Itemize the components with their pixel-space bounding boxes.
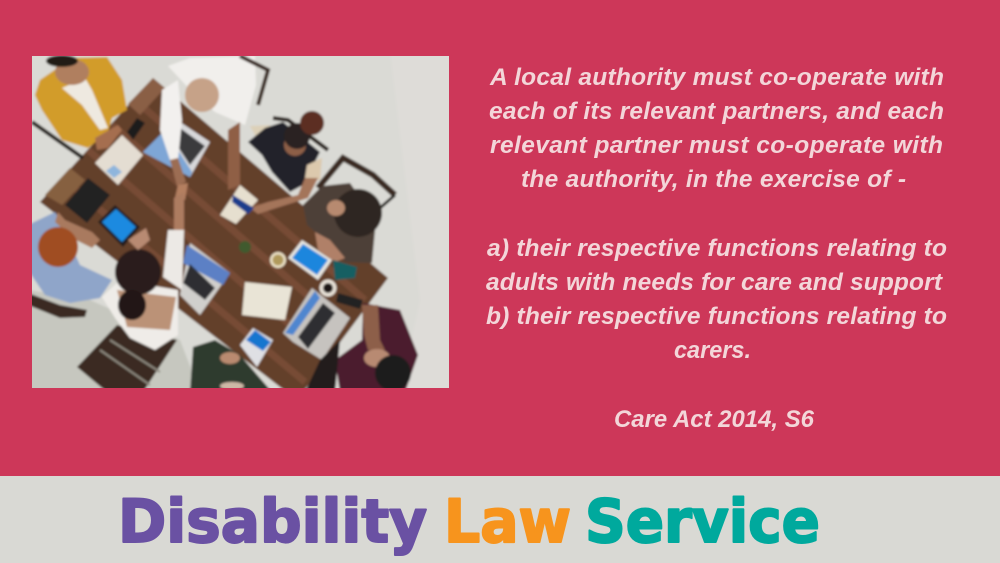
clause b line 1: b) their respective functions relating to bbox=[486, 303, 947, 330]
laptop: centre left bbox=[180, 243, 230, 315]
notebook bbox=[242, 282, 292, 320]
logo word: Law: Law bbox=[444, 487, 571, 557]
photo: team meeting around a table bbox=[28, 52, 453, 400]
person: woman with hair bun bbox=[248, 111, 328, 214]
device: tablet, coffee, plant bbox=[239, 240, 363, 309]
person: curly haired man bbox=[303, 158, 395, 263]
quote line 2: each of its relevant partners, and each bbox=[489, 98, 944, 125]
small tablet and bottom person bbox=[190, 328, 273, 392]
footer band bbox=[0, 476, 1000, 563]
clause a line 1: a) their respective functions relating to bbox=[487, 235, 947, 262]
citation: Care Act 2014, S6 bbox=[614, 406, 814, 433]
clause b line 2: carers. bbox=[674, 337, 751, 364]
person: man in maroon top bbox=[305, 303, 418, 392]
quote line 3: relevant partner must co-operate with bbox=[490, 132, 943, 159]
logo word: Disability: Disability bbox=[118, 487, 427, 557]
wooden table bbox=[40, 78, 388, 400]
quote text bbox=[486, 64, 947, 433]
tablet: left bbox=[98, 205, 140, 247]
person: man in yellow jacket bbox=[32, 55, 127, 158]
logo word: Service: Service bbox=[585, 487, 820, 557]
laptop: front right bbox=[283, 288, 350, 360]
device: phone and white notepad bbox=[220, 185, 258, 224]
laptops and devices at top of table bbox=[65, 118, 210, 223]
quote line 4: the authority, in the exercise of - bbox=[521, 166, 906, 193]
clause a line 2: adults with needs for care and support bbox=[486, 269, 943, 296]
logo: Disability Law Service bbox=[118, 487, 820, 557]
person: bald man in white shirt bbox=[160, 56, 256, 200]
floor bbox=[32, 56, 422, 388]
person: woman with dark ponytail bbox=[77, 192, 184, 392]
chair top right bbox=[240, 56, 268, 105]
quote line 1: A local authority must co-operate with bbox=[489, 64, 944, 91]
person: boy in blue shirt bbox=[28, 212, 112, 318]
